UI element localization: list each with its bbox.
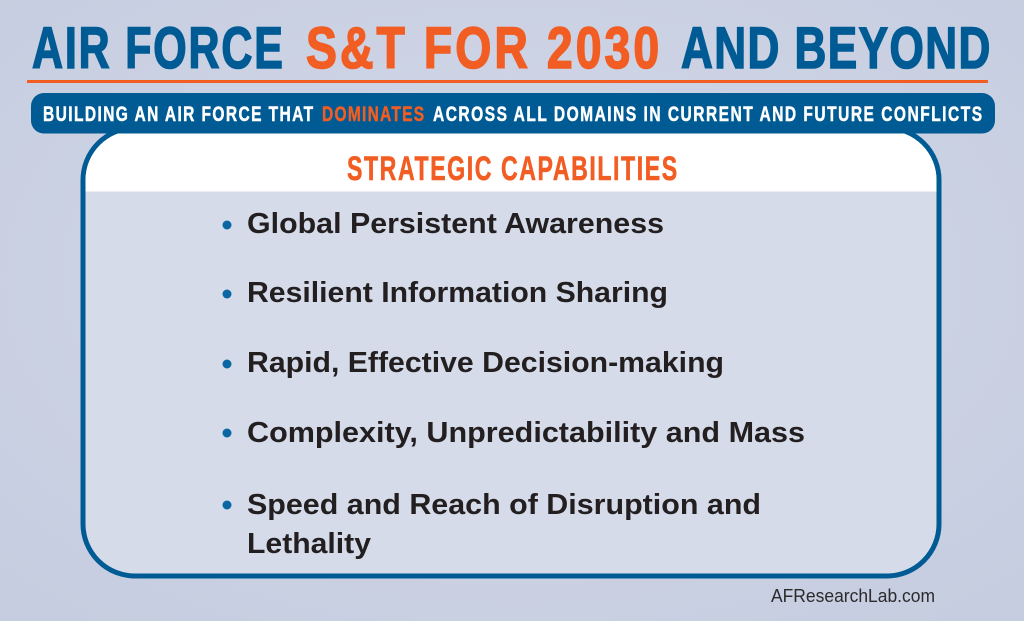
subtitle banner: DOMINATES: [322, 102, 424, 126]
panel body: [83, 128, 939, 576]
source url: AFResearchLab.com: [771, 586, 935, 606]
bullet list: [222, 208, 805, 560]
subtitle banner: [31, 93, 995, 134]
bullet: complexity: Complexity, Unpredictability and Mass: [247, 417, 805, 449]
title: AND BEYOND: [681, 15, 990, 80]
subtitle banner: ACROSS ALL DOMAINS IN CURRENT AND FUTURE CONFLICTS: [433, 102, 982, 126]
bullet: global persistent awareness: Global Persistent Awareness: [247, 208, 664, 240]
panel heading: STRATEGIC CAPABILITIES: [347, 151, 677, 188]
title: S&T FOR 2030: [306, 16, 659, 81]
bullet: rapid decision-making: Rapid, Effective Decision-making: [247, 347, 724, 379]
bullet: speed and reach: Lethality: [247, 528, 371, 560]
panel: strategic capabilities: [83, 128, 939, 576]
subtitle banner: BUILDING AN AIR FORCE THAT: [43, 102, 314, 126]
bullet: speed and reach: Speed and Reach of Disruption and: [247, 489, 761, 521]
bullet: speed and reach: [222, 489, 761, 560]
panel header band: [86, 130, 936, 192]
title: AIR FORCE: [32, 16, 283, 81]
title: [32, 15, 990, 81]
bullet: resilient information sharing: Resilient Information Sharing: [247, 277, 668, 309]
